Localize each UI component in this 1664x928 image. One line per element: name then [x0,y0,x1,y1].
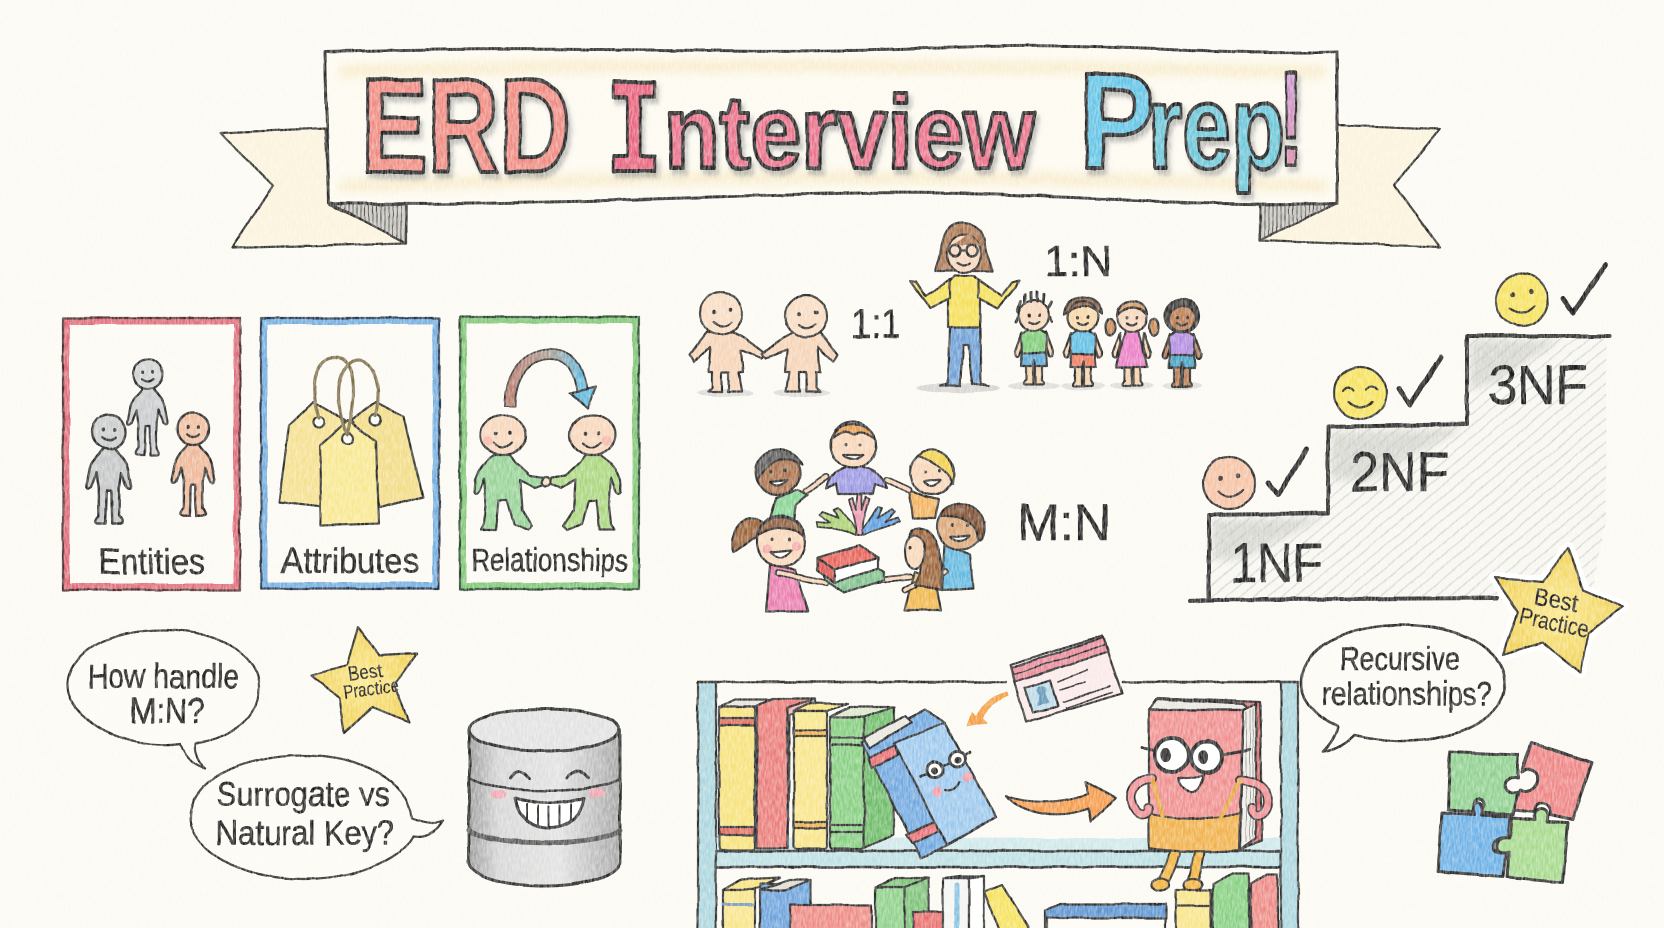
staircase: normal forms [1190,265,1610,601]
diagram: one to one [690,292,901,397]
banner right tail [1260,125,1440,247]
diagram: many to many [732,422,1111,612]
arrow: card to book [966,692,1009,727]
children in a circle [732,422,985,612]
icon: two people shaking hands [474,415,622,530]
speech bubble: recursive relationships: Recursive [1340,640,1460,677]
speech bubble: surrogate vs natural key: Surrogate vs [216,775,390,814]
icon: smiley 2NF with check [1334,357,1441,419]
speech bubble: surrogate vs natural key [190,755,443,879]
books lower shelf [723,874,1278,928]
badge: best practice star large: Best [1532,583,1580,618]
icon: smiley 3NF with check [1496,265,1606,326]
books upper shelf [719,699,894,850]
diagram: one to many [910,223,1202,393]
label: attributes: Attributes [281,540,419,581]
badge: best practice star small [312,627,417,733]
badge: best practice star small: Practice [342,675,400,704]
icon: smiley 1NF with check [1203,449,1307,509]
figure: teacher [910,223,1019,386]
icon: jigsaw puzzle [1438,743,1592,882]
title text: I [606,59,662,212]
icon: arc arrow [510,354,596,408]
book: blue leaning with face [862,710,996,858]
icon: stacked books [817,545,884,593]
label: entities: Entities [99,541,205,582]
speech bubble: how handle M:N: M:N? [130,690,205,731]
title text: ERD [361,52,571,201]
banner main [325,46,1337,204]
panel: entities [63,318,240,590]
bookcase [698,636,1298,928]
icon: three people [86,359,214,524]
figure: four children [1015,293,1201,387]
piece: blue [1438,803,1510,877]
labels: 1NF 2NF 3NF [1230,353,1588,594]
badge: best practice star large [1495,548,1623,673]
speech bubble: recursive relationships: relationships? [1322,675,1492,712]
banner folds [330,203,1337,243]
icon: ID card [1010,636,1122,722]
icon: smiling database cylinder [469,709,620,886]
title banner [220,45,1440,248]
speech bubble: surrogate vs natural key: Natural Key? [216,814,394,853]
shelf frame [698,682,1298,928]
piece: top-left green [1448,752,1518,815]
labels: 1NF 2NF 3NF: 2NF [1350,440,1449,503]
title text: rep [1148,60,1285,194]
labels: 1NF 2NF 3NF: 1NF [1230,531,1323,594]
label: 1:N: 1:N [1044,237,1112,286]
badge: best practice star small: Best [347,659,384,686]
character: red book with glasses [1131,698,1268,891]
badge: best practice star large: Practice [1517,602,1591,643]
title text: P [1079,45,1155,197]
title text: nterview [664,75,1036,191]
label: 1:1: 1:1 [851,300,901,347]
arrow: blue book to red book [1006,782,1116,822]
icon: coloured hands [817,495,900,535]
speech bubble: how handle M:N [67,630,259,768]
speech bubble: how handle M:N: How handle [88,658,239,696]
title text: ! [1279,45,1303,194]
labels: 1NF 2NF 3NF: 3NF [1488,353,1588,416]
title text [361,45,1303,212]
banner left tail [220,128,406,248]
piece: red [1513,743,1592,820]
speech bubble: recursive relationships [1301,625,1505,752]
panel: relationships [460,317,639,589]
piece: lower-right green [1496,809,1568,882]
label: M:N: M:N [1017,494,1111,552]
icon: tags [279,357,423,525]
panel: attributes [261,318,439,589]
label: relationships: Relationships [471,542,628,578]
